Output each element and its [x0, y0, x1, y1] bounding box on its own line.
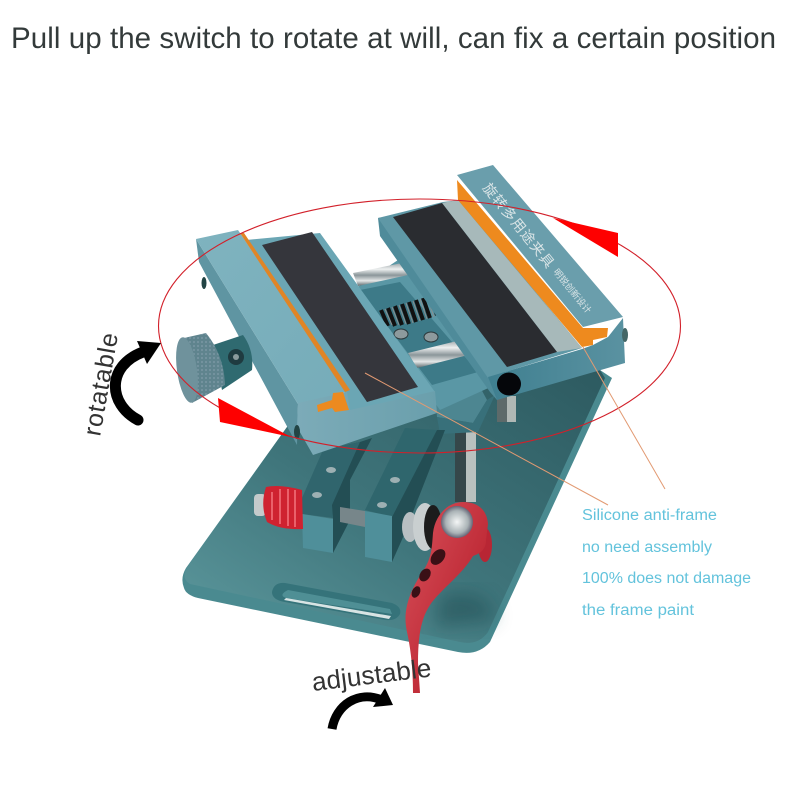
inner surface	[246, 233, 435, 412]
orange silicone frame	[457, 180, 608, 347]
central mount under the jaws	[435, 387, 495, 434]
icon: curved adjust arrow	[332, 688, 393, 729]
clamp block: right	[365, 428, 445, 562]
callout line: pad	[365, 373, 608, 505]
knob collar	[213, 335, 252, 390]
lower steel rod	[408, 339, 468, 368]
right jaw	[378, 165, 625, 400]
black silicone pad	[393, 203, 557, 367]
lever holes	[410, 546, 448, 599]
jaw side face	[196, 239, 298, 445]
jaw top face	[196, 230, 347, 404]
jaw front face	[488, 318, 625, 400]
product: rotating fixture	[173, 165, 628, 693]
base plate	[182, 370, 612, 653]
engraved rail text: 旋转多用途夹具	[480, 180, 558, 271]
threaded screw	[340, 507, 365, 527]
rotation ellipse	[158, 199, 680, 453]
support posts	[455, 396, 516, 502]
clamp block: left	[302, 438, 372, 553]
knob face	[173, 336, 201, 404]
callout text: Silicone anti-frame	[582, 507, 717, 524]
callout line: orange frame	[583, 347, 665, 489]
jaw left face	[378, 216, 507, 400]
callout text: the frame paint	[582, 602, 695, 619]
lever bolt head	[441, 506, 473, 538]
callout text: 100% does not damage	[582, 570, 751, 587]
red arrowhead: upper right	[553, 218, 618, 257]
red adjusting knob	[254, 486, 303, 529]
lever shadow	[435, 593, 495, 628]
centre section with rods and spring	[353, 260, 495, 410]
left jaw	[196, 230, 437, 455]
callout text	[582, 507, 751, 619]
black silicone pad	[262, 232, 418, 402]
title: Pull up the switch to rotate at will, can fix a certain position	[11, 22, 776, 55]
rotatable label: rotatable	[78, 331, 124, 438]
adjustable label: adjustable	[310, 653, 433, 697]
block front	[302, 514, 333, 553]
icon: curved rotate arrow	[115, 341, 161, 420]
knurled thumb wheel	[184, 333, 225, 403]
red arrowhead: lower left	[218, 398, 291, 437]
callout text: no need assembly	[582, 539, 712, 556]
washer and bearing	[402, 503, 442, 551]
upper steel rod	[353, 262, 408, 286]
slot in base plate	[272, 583, 400, 620]
orange frame end	[317, 392, 349, 412]
right jaw: 明锐创新设计	[551, 266, 594, 315]
light inner strip	[442, 200, 582, 352]
orange strip	[240, 233, 350, 392]
spring	[381, 296, 439, 326]
red quick-release lever	[406, 502, 492, 693]
mounting screws	[394, 329, 438, 342]
round hole	[497, 372, 521, 396]
side screw on right jaw	[622, 328, 628, 342]
knob on left jaw	[173, 333, 252, 404]
top rail	[457, 165, 623, 327]
jaw upper surface	[378, 200, 582, 378]
jaw front face	[297, 391, 437, 455]
